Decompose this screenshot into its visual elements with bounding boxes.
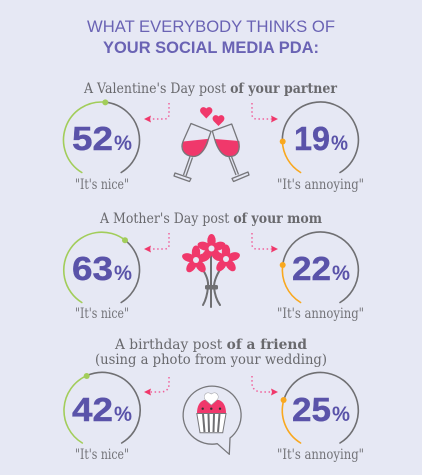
chart: 22% it's annoying [277, 232, 364, 322]
heading: Valentine's Day post: A Valentine's Day post of your partner [83, 81, 338, 97]
heading: Mother's Day post: A Mother's Day post of your mom [99, 211, 322, 227]
icon: flower bouquet [181, 234, 241, 307]
arrow: to 63% [144, 233, 169, 252]
arrow: to 25% [252, 376, 278, 396]
arrow: to 52% [144, 103, 169, 122]
chart: 25% it's annoying: "It's annoying" [277, 447, 364, 463]
chart: 19% it's annoying: "It's annoying" [277, 177, 364, 193]
title [87, 18, 335, 57]
chart: 52% it's nice: % [114, 132, 132, 155]
arrow: to 19% [252, 103, 278, 122]
chart: 22% it's annoying: "It's annoying" [277, 306, 364, 322]
arrow: to 42% [144, 377, 169, 396]
chart: 52% it's nice [64, 99, 139, 193]
chart: 63% it's nice [64, 232, 140, 322]
chart: 42% it's nice: 42 [72, 391, 113, 428]
chart: 25% it's annoying [277, 372, 364, 463]
chart: 19% it's annoying [277, 102, 364, 193]
title: WHAT EVERYBODY THINKS OF [87, 18, 335, 36]
chart: 52% it's nice: 52 [72, 120, 113, 157]
chart: 42% it's nice: % [114, 403, 132, 426]
icon: clinking wine glasses [174, 107, 249, 182]
chart: 63% it's nice: "It's nice" [75, 306, 129, 322]
chart: 19% it's annoying: 19 [294, 120, 330, 157]
chart: 63% it's nice: 63 [72, 250, 113, 287]
chart: 22% it's annoying: 22 [292, 250, 331, 287]
chart: 42% it's nice: "It's nice" [75, 447, 129, 463]
chart: 22% it's annoying: % [332, 262, 350, 285]
arrow: to 22% [252, 233, 278, 252]
chart: 19% it's annoying: % [331, 132, 348, 155]
heading: birthday post [95, 337, 327, 368]
chart: 42% it's nice [64, 372, 140, 463]
chart: 25% it's annoying: 25 [292, 391, 331, 428]
chart: 25% it's annoying: % [332, 403, 350, 426]
title: YOUR SOCIAL MEDIA PDA: [103, 39, 319, 57]
icon: cupcake speech bubble [183, 386, 241, 454]
chart: 52% it's nice: "It's nice" [75, 177, 129, 193]
chart: 63% it's nice: % [114, 262, 132, 285]
heading: birthday post: (using a photo from your wedding) [95, 352, 327, 368]
heading: birthday post: A birthday post of a friend [114, 337, 308, 353]
